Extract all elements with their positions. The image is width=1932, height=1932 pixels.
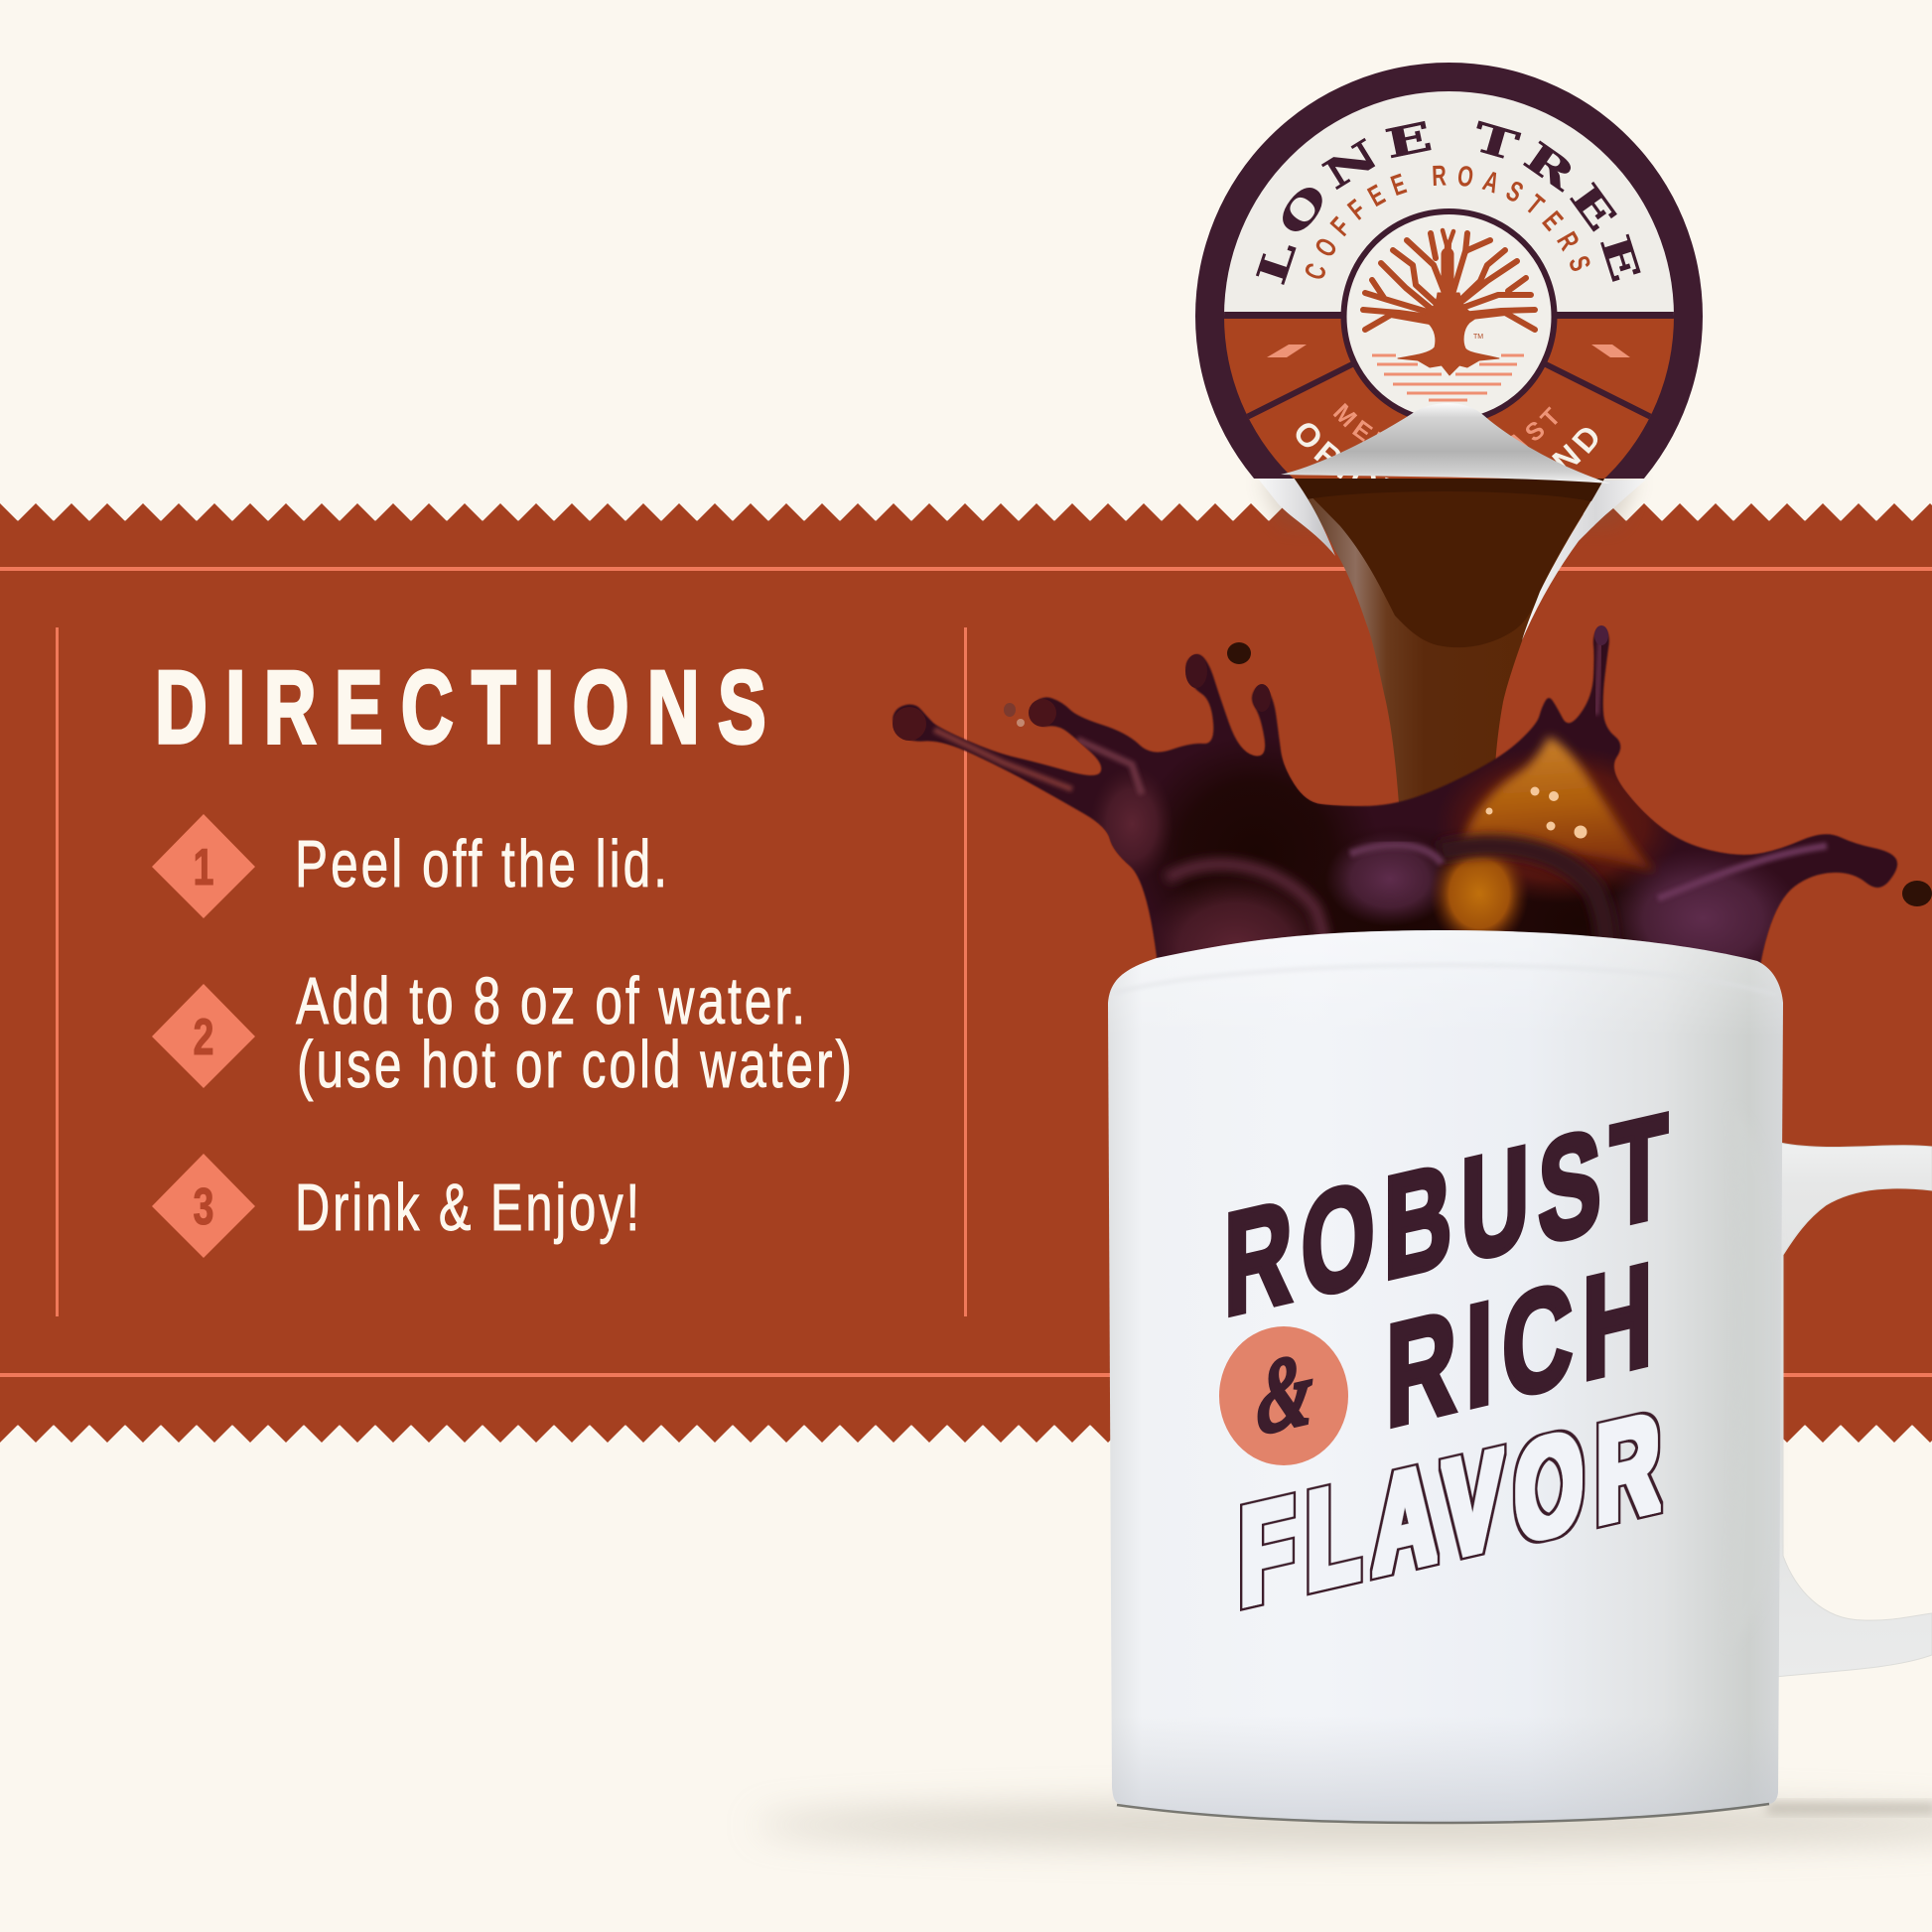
directions band [0, 503, 1932, 1443]
pod shadow [1261, 477, 1638, 526]
handle joint shading [1727, 1107, 1777, 1648]
mug ground shadow [755, 1802, 1932, 1847]
mug [1108, 930, 1932, 1823]
mug handle [1775, 1142, 1932, 1677]
lid upper field [1224, 91, 1674, 479]
step 2: 2 [193, 1009, 214, 1066]
step 1: 1 [193, 839, 214, 897]
mug text: robust: ROBUST [1224, 1082, 1677, 1347]
roast label: MEDIUM ROAST [1332, 403, 1558, 447]
heading: directions: DIRECTIONS [155, 650, 784, 765]
step 3 [152, 1154, 642, 1258]
peeled lid flap [1281, 403, 1610, 483]
mug text: rich: RICH [1386, 1231, 1662, 1458]
step 3: 3 [193, 1178, 214, 1236]
step 1 [152, 814, 670, 918]
splash highlights [1485, 786, 1587, 838]
step 2: (use hot or cold water) [297, 1028, 855, 1102]
step 3: Drink & Enjoy! [295, 1171, 642, 1245]
trademark: TM [1473, 334, 1483, 341]
panel: directions [56, 627, 967, 1316]
ampersand badge: & [1257, 1328, 1312, 1458]
mug base line [1117, 1804, 1769, 1823]
mug rim highlight [1114, 965, 1777, 995]
brand name: LONE TREE [1256, 121, 1641, 285]
mug body [1108, 930, 1783, 1823]
icon: tree [1363, 230, 1535, 375]
step 1: Peel off the lid. [295, 827, 670, 901]
water lines [1372, 355, 1524, 400]
ampersand badge [1219, 1326, 1348, 1465]
splash interior shading [934, 640, 1827, 1023]
lid peel side flaps [1255, 475, 1646, 640]
brand subtitle: COFFEE ROASTERS [1305, 165, 1590, 279]
tree medallion [1344, 211, 1555, 422]
splash droplets [893, 625, 1932, 906]
splash silhouette [893, 626, 1897, 1003]
step 2 [152, 964, 855, 1102]
step 2: Add to 8 oz of water. [296, 964, 808, 1038]
coffee stream [1294, 479, 1604, 804]
coffee pod lid [1195, 63, 1703, 479]
mug text: flavor: FLAVOR [1240, 1381, 1673, 1636]
blend label: ORIGINAL BLEND [1297, 423, 1598, 479]
pod rim [1195, 63, 1703, 479]
coffee splash [892, 625, 1932, 963]
